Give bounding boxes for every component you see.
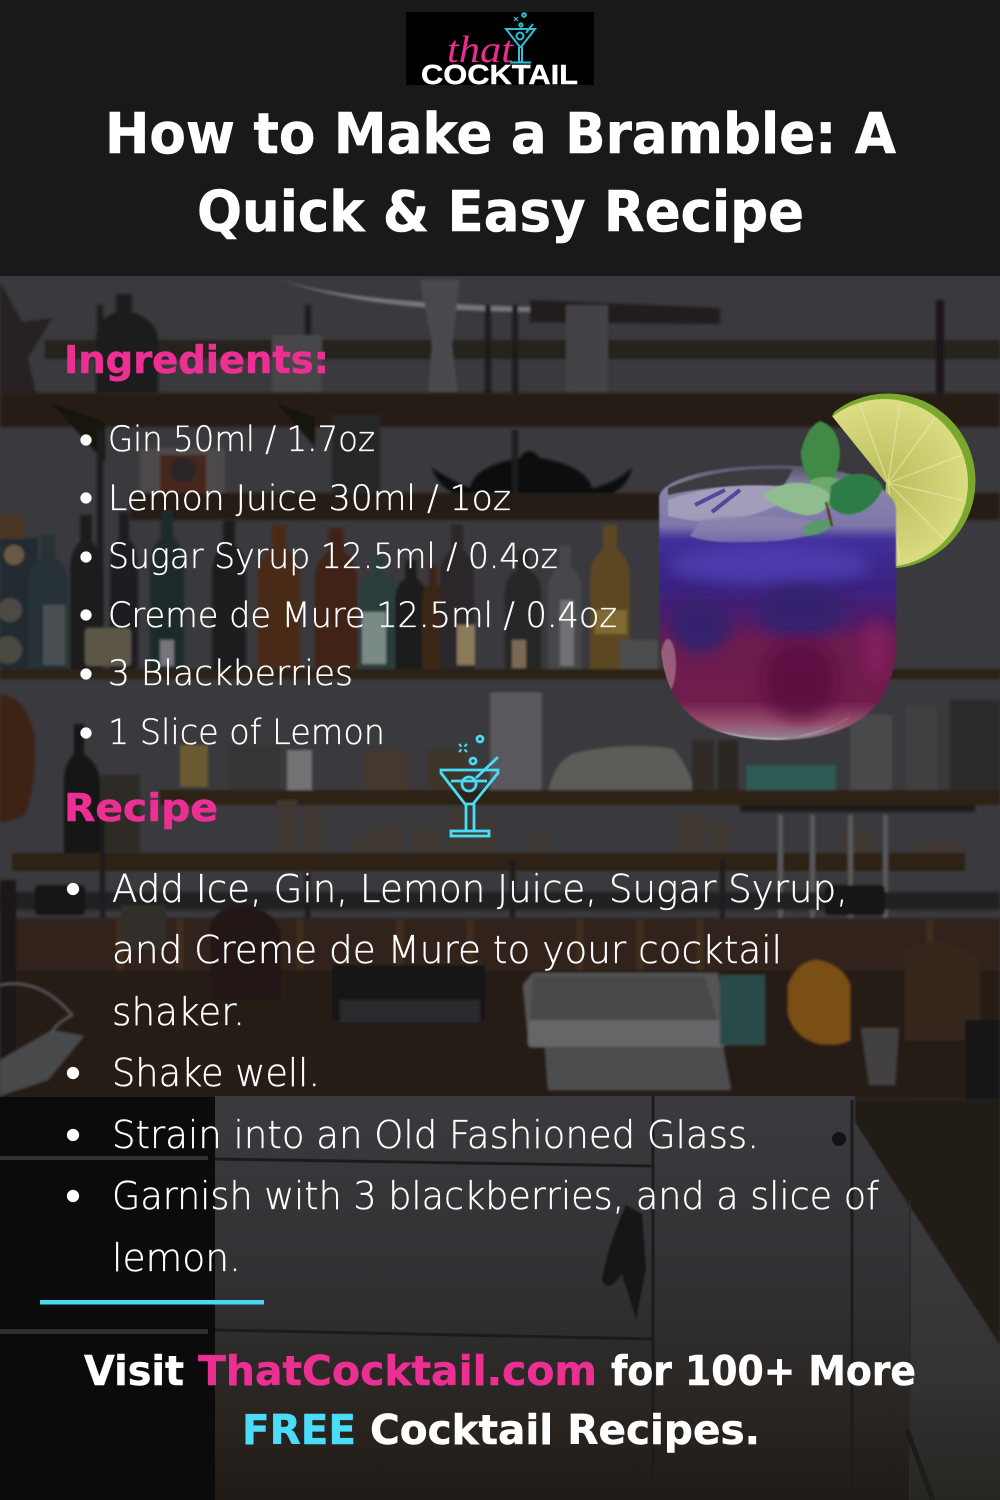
recipe steps: lemon. (112, 1236, 241, 1280)
recipe steps: Garnish with 3 blackberries, and a slice of (112, 1174, 880, 1218)
recipe steps: Add Ice, Gin, Lemon Juice, Sugar Syrup, (112, 867, 848, 911)
ingredients list: 3 Blackberries (108, 654, 353, 694)
recipe steps (67, 867, 880, 1280)
recipe steps: shaker. (112, 990, 245, 1034)
recipe steps: Shake well. (112, 1051, 320, 1095)
icon: martini glass (441, 736, 498, 836)
recipe steps: Strain into an Old Fashioned Glass. (112, 1113, 759, 1157)
ceiling band (0, 0, 1000, 276)
ingredients list: Lemon Juice 30ml / 1oz (108, 479, 511, 519)
ingredients list: 1 Slice of Lemon (108, 713, 385, 753)
footer call to action: Cocktail Recipes. (370, 1406, 760, 1454)
title: How to Make a Bramble: A (105, 102, 897, 167)
title (105, 102, 897, 245)
ingredients list (80, 420, 617, 753)
lower shelf items (0, 692, 1000, 965)
mint sprig (762, 421, 883, 536)
glass (659, 465, 896, 740)
bottle shelf (0, 510, 1000, 679)
lime slice (832, 394, 976, 568)
logo script "that": that (447, 29, 515, 71)
accent line (40, 1300, 264, 1304)
heading: recipe: Recipe (64, 786, 218, 830)
heading: ingredients: Ingredients: (64, 338, 329, 382)
shelf 2 (0, 393, 1000, 670)
recipe steps: and Creme de Mure to your cocktail (112, 928, 782, 972)
title: Quick & Easy Recipe (197, 180, 804, 245)
photo: bramble cocktail (659, 394, 976, 740)
backsplash and counter (0, 880, 1000, 1100)
logo wordmark: COCKTAIL (421, 59, 578, 90)
footer call to action: Visit (84, 1347, 184, 1395)
footer call to action: ThatCocktail.com (198, 1347, 597, 1395)
ingredients list: Gin 50ml / 1.7oz (108, 420, 375, 460)
logo (406, 12, 594, 90)
ingredients list: Sugar Syrup 12.5ml / 0.4oz (108, 537, 558, 577)
ingredients list: Creme de Mure 12.5ml / 0.4oz (108, 596, 617, 636)
dark wall seen through rim (668, 469, 793, 495)
footer call to action: FREE (242, 1406, 356, 1454)
footer call to action (84, 1347, 916, 1454)
logo martini icon (506, 13, 535, 62)
lower cabinets (0, 1096, 1000, 1500)
drink texture (660, 485, 890, 740)
top shelf with glassware (0, 279, 1000, 505)
footer call to action: for 100+ More (611, 1347, 916, 1395)
